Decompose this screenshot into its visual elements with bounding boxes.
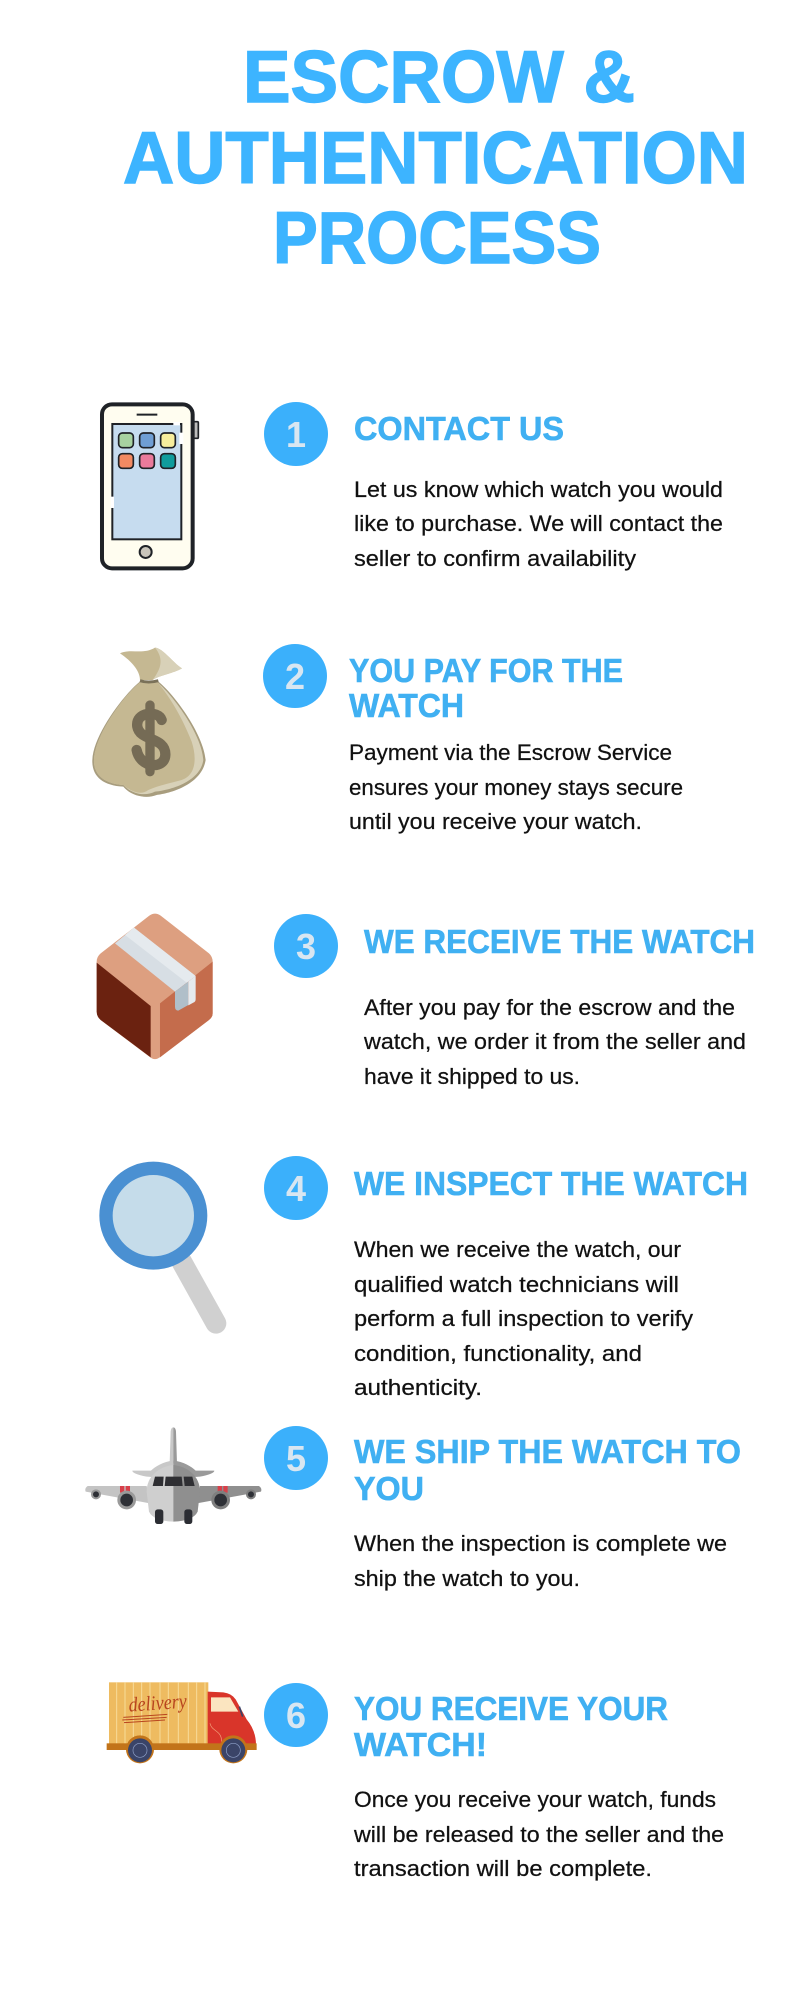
body text: ship the watch to you. (354, 1566, 580, 1591)
heading: WE SHIP THE WATCH TO (354, 1433, 741, 1470)
body text: When we receive the watch, our (354, 1237, 681, 1262)
title (123, 37, 748, 279)
step 6: you receive your watch (107, 1682, 724, 1881)
body text: authenticity. (354, 1375, 482, 1400)
heading (349, 652, 623, 724)
body text: watch, we order it from the seller and (363, 1029, 746, 1054)
body text: qualified watch technicians will (354, 1272, 679, 1297)
number badge 3 (274, 914, 338, 978)
body text: until you receive your watch. (349, 809, 642, 834)
body text (354, 1531, 727, 1591)
icon: delivery truck (107, 1682, 257, 1763)
body text: After you pay for the escrow and the (364, 995, 735, 1020)
number badge 4: 4 (286, 1168, 306, 1209)
number badge 3: 3 (296, 926, 316, 967)
body text (354, 477, 723, 571)
icon: money bag (92, 648, 206, 797)
body text (353, 1787, 724, 1881)
body text: seller to confirm availability (354, 546, 636, 571)
heading: YOU (354, 1470, 424, 1507)
heading: WATCH (349, 687, 464, 724)
body text: have it shipped to us. (364, 1064, 580, 1089)
heading: WATCH! (354, 1726, 487, 1763)
heading: WE RECEIVE THE WATCH (364, 923, 755, 960)
body text: When the inspection is complete we (354, 1531, 727, 1556)
step 5: we ship the watch to you (85, 1426, 741, 1591)
title: ESCROW & (243, 37, 635, 118)
number badge 4 (264, 1156, 328, 1220)
body text: condition, functionality, and (354, 1341, 642, 1366)
heading: YOU RECEIVE YOUR (354, 1690, 668, 1727)
number badge 2 (263, 644, 327, 708)
heading (354, 1690, 668, 1763)
step 3: we receive the watch (97, 914, 755, 1089)
body text: transaction will be complete. (354, 1856, 652, 1881)
number badge 6: 6 (286, 1695, 306, 1736)
number badge 1: 1 (286, 414, 306, 455)
number badge 1 (264, 402, 328, 466)
icon: delivery truck: delivery (128, 1691, 188, 1717)
body text: Let us know which watch you would (354, 477, 723, 502)
body text: Once you receive your watch, funds (354, 1787, 716, 1812)
title: AUTHENTICATION (123, 118, 748, 199)
heading (354, 1433, 741, 1507)
body text: Payment via the Escrow Service (349, 740, 672, 765)
step 1: contact us (102, 402, 723, 571)
step 2: you pay for the watch (92, 644, 683, 834)
heading: WE INSPECT THE WATCH (354, 1165, 748, 1202)
body text (363, 995, 746, 1089)
heading: CONTACT US (354, 410, 564, 447)
body text: perform a full inspection to verify (354, 1306, 693, 1331)
heading: YOU PAY FOR THE (349, 652, 623, 689)
icon: airplane (85, 1427, 261, 1524)
step 4: we inspect the watch (106, 1156, 748, 1400)
icon: magnifying glass (106, 1168, 216, 1323)
body text: ensures your money stays secure (349, 775, 683, 800)
number badge 2: 2 (285, 656, 305, 697)
body text (349, 740, 683, 834)
body text: like to purchase. We will contact the (354, 511, 723, 536)
body text: will be released to the seller and the (353, 1822, 724, 1847)
number badge 6 (264, 1683, 328, 1747)
number badge 5: 5 (286, 1438, 306, 1479)
body text (354, 1237, 693, 1400)
number badge 5 (264, 1426, 328, 1490)
title: PROCESS (273, 198, 601, 279)
icon: smartphone (102, 404, 198, 568)
icon: cardboard box (97, 914, 213, 1059)
